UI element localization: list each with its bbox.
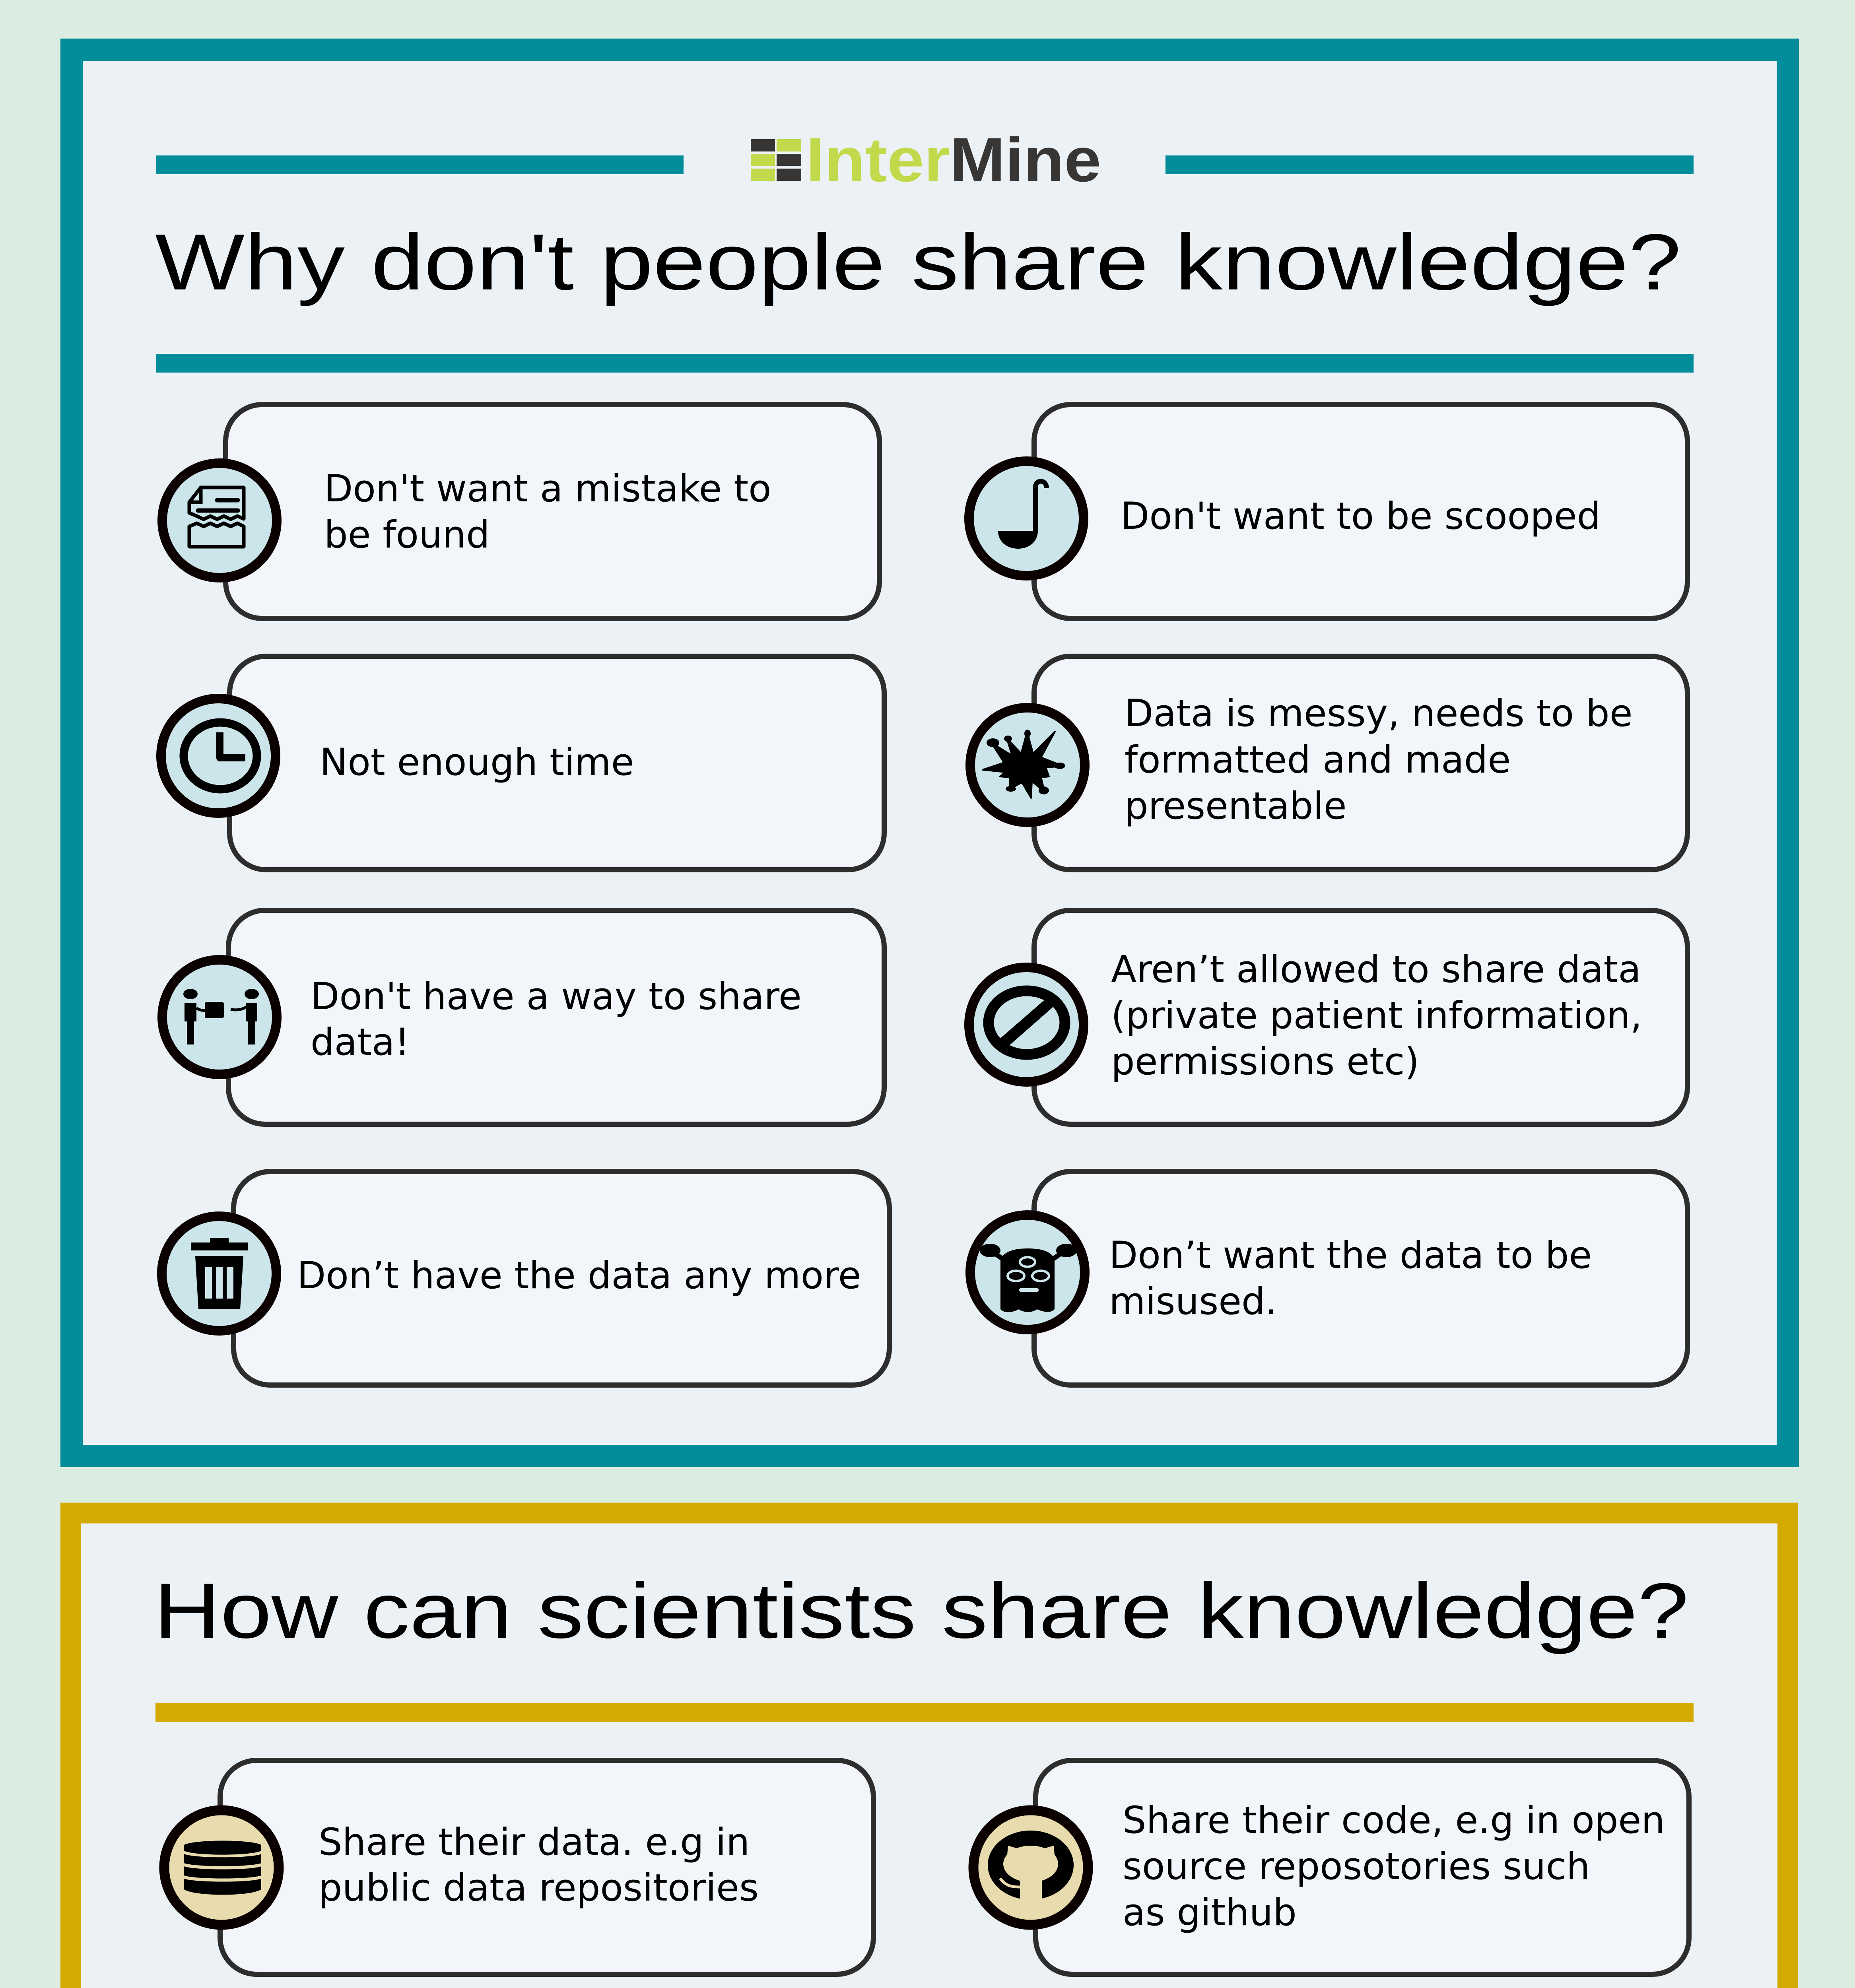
card: share code	[973, 1761, 1689, 1974]
icon: ink splat	[970, 708, 1085, 822]
label: source reposotories such	[1123, 1845, 1590, 1888]
label: Don’t want the data to be	[1109, 1234, 1592, 1277]
label: Aren’t allowed to share data	[1111, 948, 1641, 991]
heading: How can scientists share knowledge?	[154, 1567, 1689, 1654]
card: scooped	[969, 405, 1688, 619]
card: share data	[164, 1761, 873, 1974]
icon: monster	[970, 1215, 1085, 1330]
heading: Why don't people share knowledge?	[155, 218, 1681, 307]
heading underline	[155, 1703, 1694, 1722]
label: formatted and made	[1125, 738, 1511, 782]
icon: trash can	[162, 1216, 276, 1331]
card box	[1034, 405, 1688, 619]
panel frame	[72, 50, 1788, 1456]
card box	[226, 405, 880, 619]
panel frame	[71, 1513, 1788, 1988]
icon: github cat	[973, 1810, 1088, 1925]
card: not allowed	[969, 911, 1688, 1124]
icon: prohibited sign	[969, 967, 1084, 1082]
card: messy data	[970, 656, 1688, 870]
panel: how scientists can share knowledge	[71, 1513, 1788, 1988]
heading underline	[156, 354, 1694, 373]
label: Don’t have the data any more	[297, 1254, 861, 1297]
label: Share their code, e.g in open	[1123, 1799, 1665, 1842]
label: Don't want a mistake to	[324, 467, 771, 511]
card box	[1034, 1171, 1688, 1385]
logo wordmark: InterMine	[806, 125, 1101, 195]
card: no longer have data	[162, 1171, 889, 1385]
card box	[1034, 656, 1688, 870]
logo grid mark	[751, 139, 801, 181]
label: misused.	[1109, 1280, 1277, 1323]
label: presentable	[1125, 784, 1347, 828]
label: Data is messy, needs to be	[1125, 692, 1633, 735]
icon: clock	[161, 699, 276, 813]
label: (private patient information,	[1111, 994, 1642, 1037]
card box	[1035, 1761, 1689, 1974]
card: misused	[970, 1171, 1688, 1385]
card: no way to share	[162, 911, 884, 1124]
card box	[234, 1171, 889, 1385]
icon: two people passing a box	[162, 960, 277, 1074]
card box	[1034, 911, 1688, 1124]
label: public data repositories	[319, 1866, 759, 1910]
logo: InterMine	[751, 125, 1101, 195]
label: Don't have a way to share	[311, 975, 802, 1018]
icon: document with tear	[162, 463, 277, 578]
header rule right	[1165, 155, 1694, 174]
label: permissions etc)	[1111, 1040, 1419, 1083]
card: mistake	[162, 405, 880, 619]
label: data!	[311, 1021, 410, 1064]
card box	[230, 656, 884, 870]
header rule left	[156, 155, 684, 174]
panel: why people don't share knowledge	[72, 50, 1788, 1456]
icon: ladle	[969, 461, 1084, 576]
icon: database	[164, 1810, 279, 1925]
card box	[228, 911, 884, 1124]
label: Share their data. e.g in	[319, 1821, 750, 1864]
card box	[220, 1761, 873, 1974]
card: time	[161, 656, 884, 870]
label: Not enough time	[320, 741, 634, 784]
label: as github	[1123, 1891, 1297, 1934]
label: be found	[324, 513, 490, 557]
label: Don't want to be scooped	[1121, 495, 1601, 538]
